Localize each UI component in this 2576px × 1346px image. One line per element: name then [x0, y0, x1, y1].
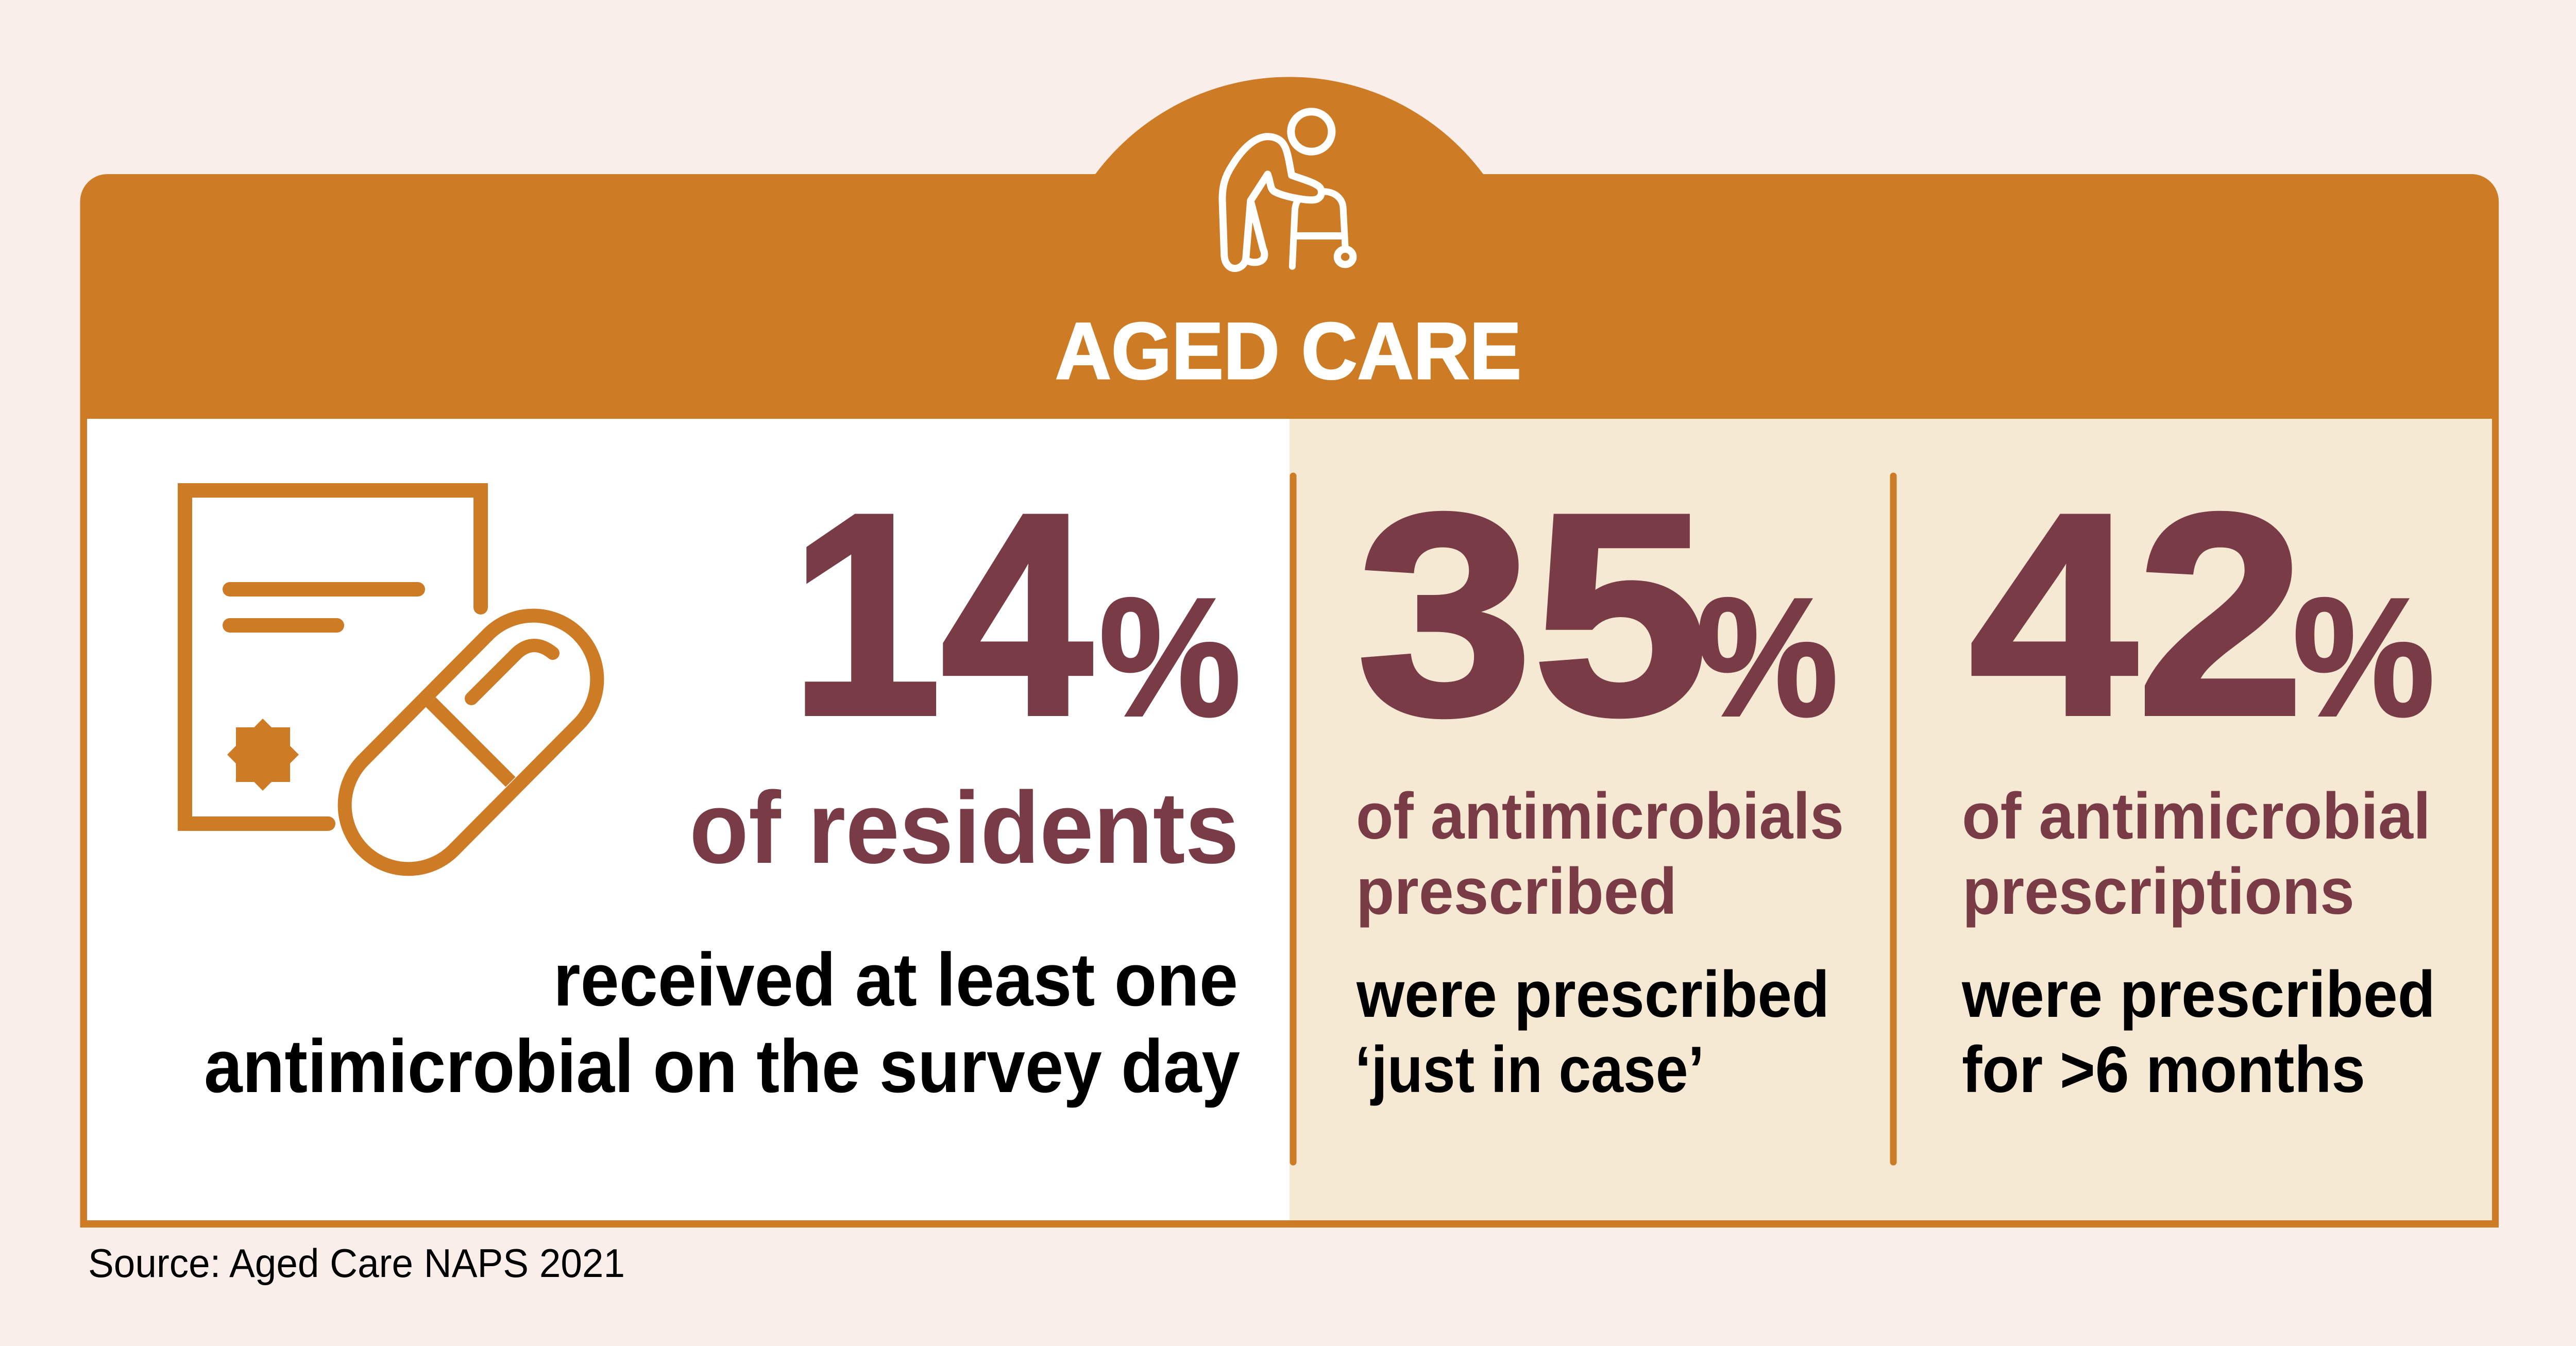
text: received at least one antimicrobial: antimicrobial on the survey day	[204, 1024, 1240, 1108]
label: of antimicrobials prescribed	[1356, 779, 1844, 928]
divider 1	[1290, 476, 1296, 1162]
text: were prescribed for over 6 months: were prescribed	[1961, 958, 2435, 1031]
label: of antimicrobials prescribed: of antimicrobials	[1356, 779, 1844, 853]
source note: Source: Aged Care NAPS 2021	[88, 1240, 625, 1286]
divider 2	[1890, 476, 1897, 1162]
percent sign: %	[1696, 563, 1838, 752]
number 35: 35	[1357, 454, 1708, 774]
text: were prescribed for over 6 months	[1961, 958, 2435, 1106]
label: of antimicrobials prescribed: prescribed	[1356, 855, 1677, 928]
right stats background	[1290, 419, 2492, 1220]
text: received at least one antimicrobial	[204, 938, 1240, 1108]
left stat background	[87, 419, 1290, 1220]
icon: person with walker	[1222, 112, 1353, 268]
percent sign: %	[2293, 563, 2435, 752]
stat: 42 percent	[1970, 454, 2435, 774]
label: of residents: of residents	[689, 771, 1239, 884]
text: were prescribed for over 6 months: for >6 months	[1962, 1033, 2365, 1106]
label: of antimicrobial prescriptions: of antimicrobial	[1962, 779, 2431, 853]
stat: 14 percent	[790, 454, 1241, 774]
label: of antimicrobial prescriptions	[1962, 779, 2431, 928]
text: received at least one antimicrobial: received at least one	[553, 938, 1238, 1021]
number 42: 42	[1970, 454, 2304, 774]
text: were prescribed just in case: ‘just in case’	[1355, 1033, 1704, 1106]
label: of antimicrobial prescriptions: prescriptions	[1962, 855, 2354, 928]
stat: 35 percent	[1357, 454, 1838, 774]
icon: prescription document and capsule	[185, 490, 597, 869]
number 14: 14	[790, 454, 1094, 774]
title: AGED CARE	[1055, 306, 1521, 396]
percent sign: %	[1099, 563, 1241, 752]
text: were prescribed just in case: were prescribed	[1356, 958, 1829, 1031]
text: were prescribed just in case	[1355, 958, 1829, 1106]
